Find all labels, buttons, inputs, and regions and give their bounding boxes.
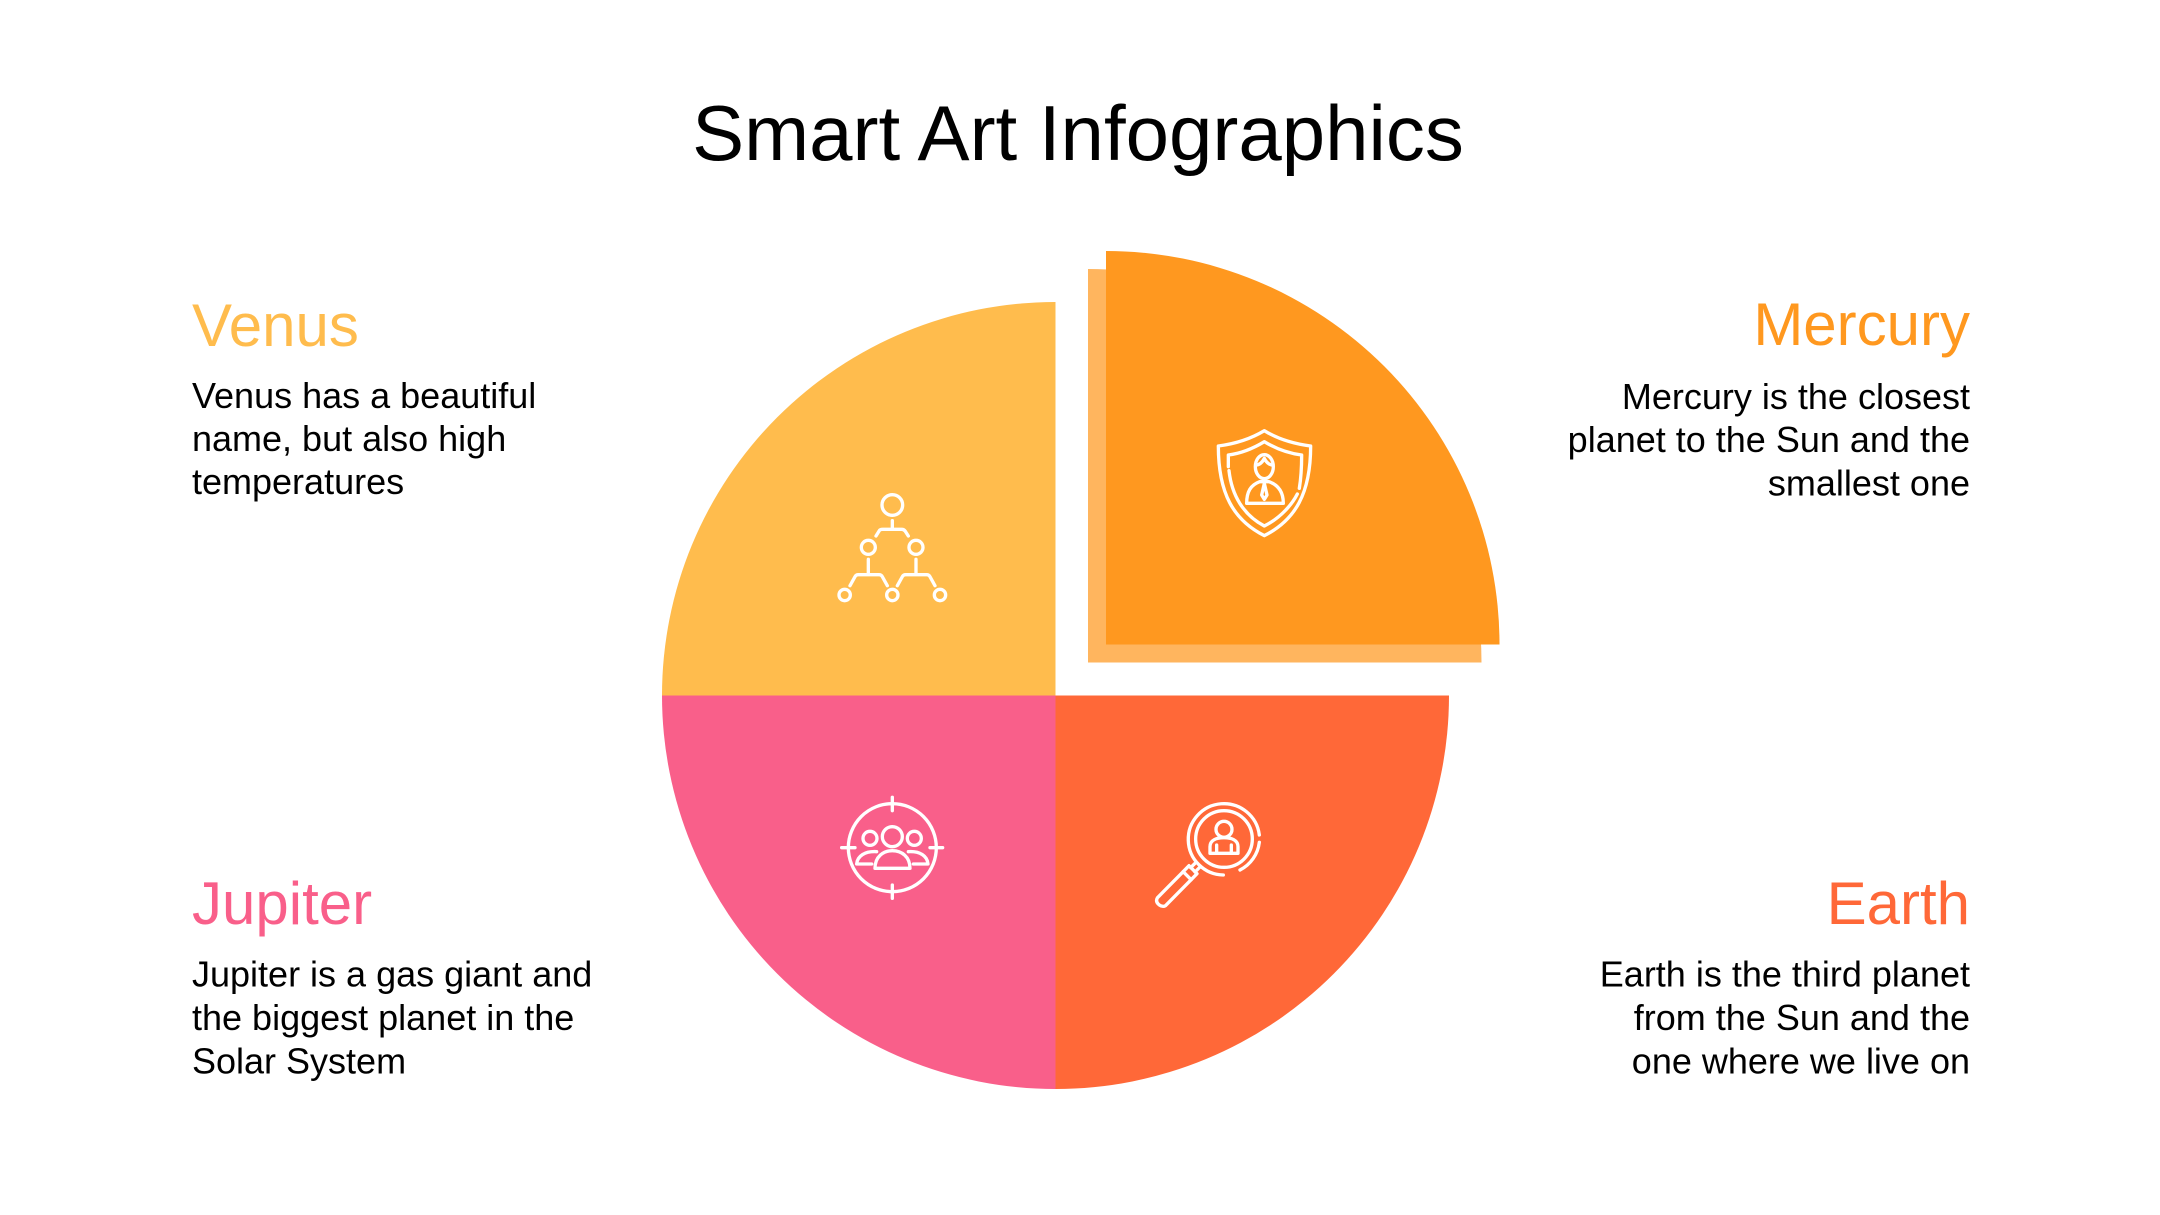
- body: Jupiter: the biggest planet in the: [192, 997, 574, 1038]
- pie slice: Venus: [662, 302, 1056, 696]
- body: Earth: Earth is the third planet: [1600, 954, 1970, 994]
- body: Mercury: smallest one: [1768, 462, 1970, 504]
- text block: Jupiter: [192, 870, 592, 1082]
- heading: Mercury: Mercury: [1753, 291, 1970, 358]
- icon: target group: [842, 797, 943, 898]
- title: Smart Art Infographics: [692, 89, 1464, 177]
- body: Venus: temperatures: [192, 461, 404, 502]
- body: Earth: from the Sun and the: [1634, 997, 1970, 1038]
- heading: Earth: Earth: [1827, 870, 1970, 937]
- text block: Earth: [1600, 870, 1970, 1082]
- text block: Mercury: [1568, 291, 1970, 504]
- pie slice: Jupiter: [662, 696, 1056, 1089]
- text block: Venus: [192, 292, 536, 502]
- body: Mercury: planet to the Sun and the: [1568, 419, 1970, 460]
- icon: magnifier with person: [1157, 804, 1259, 906]
- body: Venus: name, but also high: [192, 418, 506, 459]
- heading: Jupiter: Jupiter: [192, 870, 372, 937]
- pie slice shadow: Mercury: [1088, 269, 1482, 662]
- body: Earth: one where we live on: [1632, 1040, 1970, 1082]
- pie slice: Mercury: [1106, 251, 1500, 644]
- icon: shield with person: [1218, 431, 1311, 536]
- body: Jupiter: Jupiter is a gas giant and: [192, 954, 592, 994]
- icon: hierarchy tree: [839, 495, 946, 601]
- pie slice: Earth: [1056, 696, 1449, 1089]
- pie chart: [662, 251, 1500, 1089]
- body: Venus: Venus has a beautiful: [192, 375, 536, 416]
- body: Mercury: Mercury is the closest: [1622, 376, 1970, 417]
- body: Jupiter: Solar System: [192, 1040, 406, 1082]
- heading: Venus: Venus: [192, 292, 359, 359]
